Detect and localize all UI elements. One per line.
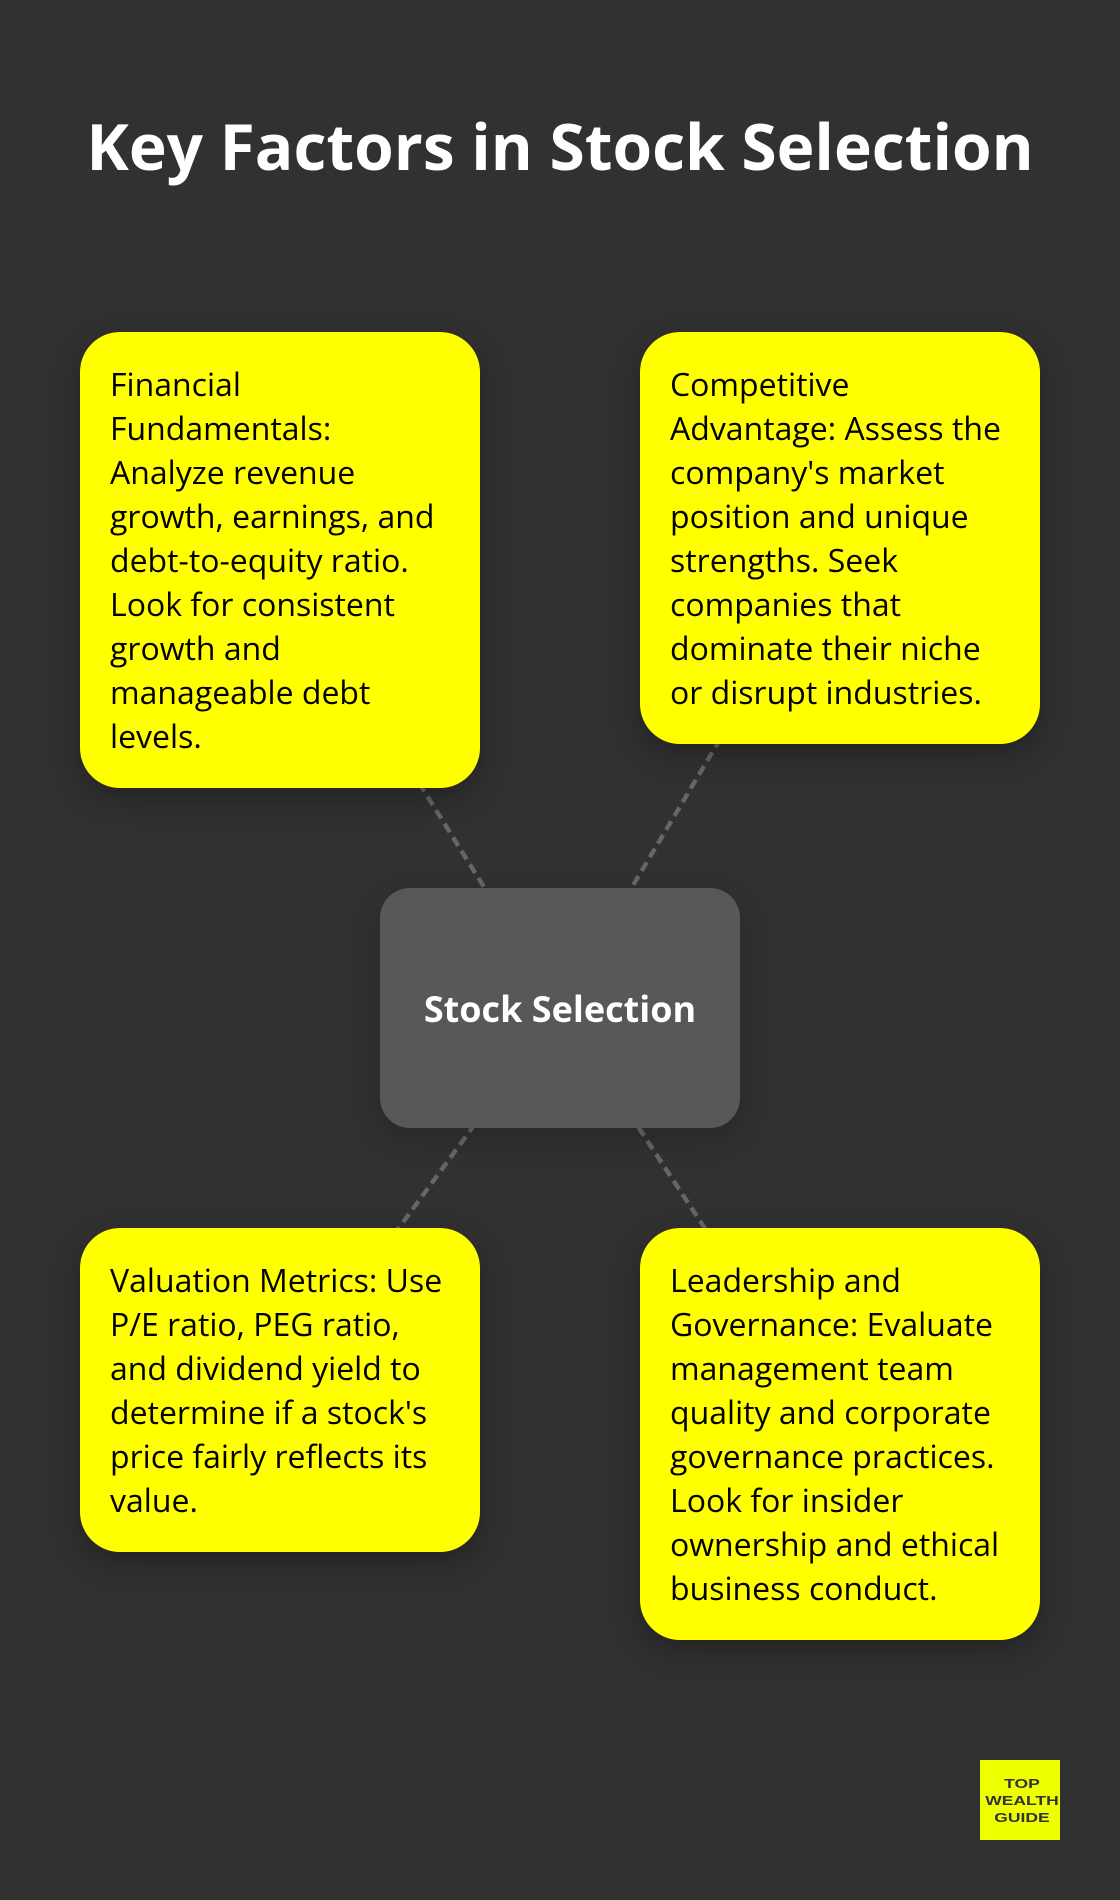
panel: leadership and governance: Governance: Evaluate — [670, 1303, 993, 1346]
title: Key Factors in Stock Selection — [86, 102, 1034, 189]
panel: competitive advantage: position and unique — [670, 495, 969, 538]
panel: competitive advantage: company's market — [670, 451, 944, 494]
panel: leadership and governance — [640, 1228, 1040, 1640]
panel: leadership and governance: Leadership and — [670, 1259, 901, 1302]
panel: financial fundamentals: Analyze revenue — [110, 451, 355, 494]
panel: leadership and governance: ownership and ethical — [670, 1523, 999, 1566]
panel: valuation metrics: determine if a stock's — [110, 1391, 427, 1434]
panel: valuation metrics — [80, 1228, 480, 1552]
panel: competitive advantage: Advantage: Assess the — [670, 407, 1001, 450]
panel: financial fundamentals: Look for consistent — [110, 583, 395, 626]
panel: valuation metrics: Valuation Metrics: Use — [110, 1259, 442, 1302]
logo: top wealth guide — [980, 1760, 1060, 1840]
panel: competitive advantage — [640, 332, 1040, 744]
panel: leadership and governance: management team — [670, 1347, 954, 1390]
panel: financial fundamentals: Financial — [110, 363, 241, 406]
panel: financial fundamentals — [80, 332, 480, 788]
panel: valuation metrics: and dividend yield to — [110, 1347, 421, 1390]
panel: leadership and governance: governance practices. — [670, 1435, 994, 1478]
panel: competitive advantage: or disrupt industries. — [670, 671, 982, 714]
panel: competitive advantage: companies that — [670, 583, 901, 626]
panel: financial fundamentals: debt-to-equity ratio. — [110, 539, 409, 582]
panel: financial fundamentals: growth, earnings, and — [110, 495, 434, 538]
panel: competitive advantage: Competitive — [670, 363, 850, 406]
central node: stock selection: Stock Selection — [424, 984, 696, 1033]
logo: top wealth guide: GUIDE — [994, 1810, 1049, 1824]
panel: financial fundamentals: Fundamentals: — [110, 407, 331, 450]
panel: valuation metrics: P/E ratio, PEG ratio, — [110, 1303, 400, 1346]
central node: stock selection — [380, 888, 740, 1128]
logo: top wealth guide: TOP — [1004, 1776, 1040, 1790]
panel: leadership and governance: Look for insider — [670, 1479, 903, 1522]
logo: top wealth guide: WEALTH — [985, 1794, 1058, 1808]
panel: valuation metrics: price fairly reflects its — [110, 1435, 427, 1478]
panel: leadership and governance: business conduct. — [670, 1567, 937, 1610]
panel: competitive advantage: dominate their niche — [670, 627, 981, 670]
panel: financial fundamentals: growth and — [110, 627, 281, 670]
panel: valuation metrics: value. — [110, 1479, 198, 1522]
panel: financial fundamentals: levels. — [110, 715, 202, 758]
panel: competitive advantage: strengths. Seek — [670, 539, 898, 582]
panel: leadership and governance: quality and corporate — [670, 1391, 991, 1434]
panel: financial fundamentals: manageable debt — [110, 671, 370, 714]
